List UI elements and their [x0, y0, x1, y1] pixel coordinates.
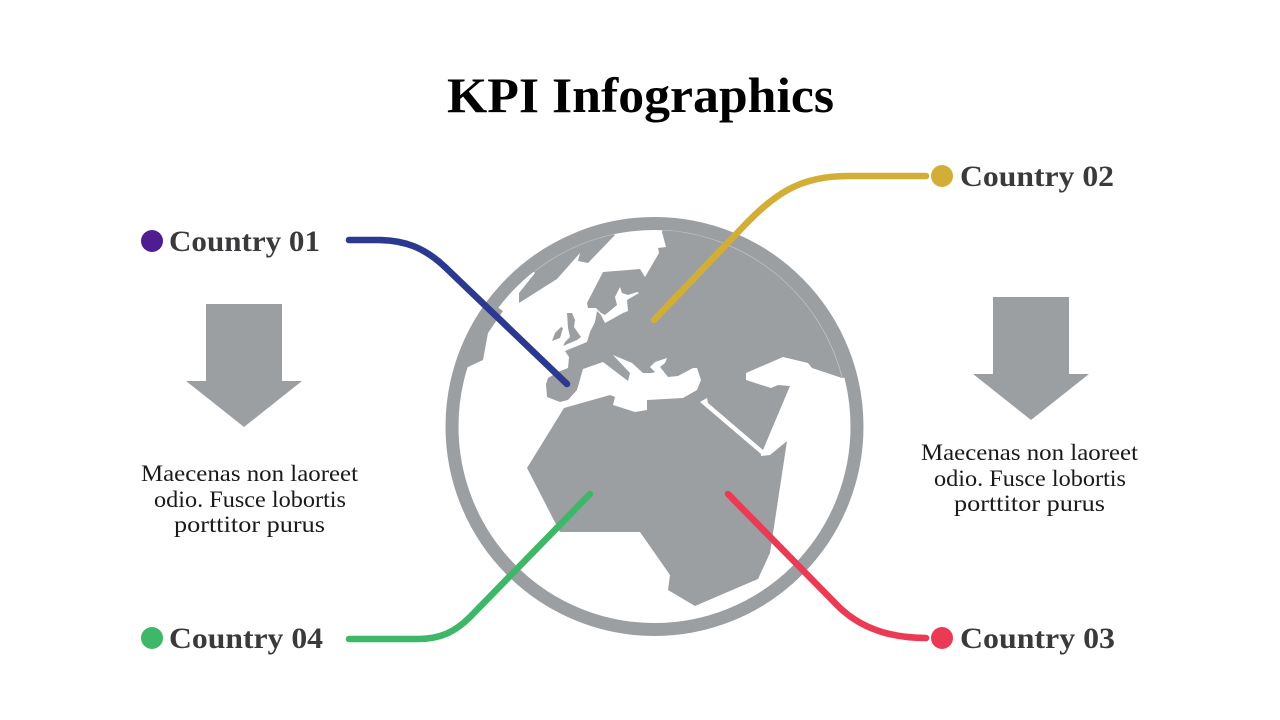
left down arrow	[186, 304, 302, 427]
hairline along the globe edge	[535, 230, 842, 377]
island: Britain	[563, 313, 581, 346]
label: Country 04: Country 04	[169, 622, 323, 655]
title: KPI Infographics	[447, 67, 834, 123]
connector: Country 01	[349, 240, 567, 384]
connector: Country 04	[349, 494, 590, 639]
right text block: odio. Fusce lobortis	[934, 466, 1126, 491]
right down arrow	[973, 297, 1089, 420]
right text block: porttitor purus	[954, 491, 1105, 516]
connector: Country 03	[728, 494, 926, 638]
connector: Country 02	[654, 176, 926, 320]
landmass: Europe, Asia and Africa	[527, 229, 846, 606]
island: Ireland	[552, 327, 563, 341]
left text block: Maecenas non laoreet	[141, 461, 359, 486]
right text block: Maecenas non laoreet	[921, 440, 1139, 465]
right text block	[921, 440, 1139, 516]
landmass: Scandinavia	[519, 233, 615, 303]
label: Country 01: Country 01	[169, 225, 320, 258]
landmass: western coast	[465, 307, 503, 368]
label: Country 03: Country 03	[960, 622, 1115, 655]
left text block: odio. Fusce lobortis	[154, 487, 346, 512]
left text block	[141, 461, 359, 537]
globe	[452, 224, 857, 630]
globe ring	[452, 224, 857, 630]
left text block: porttitor purus	[174, 512, 325, 537]
label: Country 02: Country 02	[960, 160, 1114, 193]
